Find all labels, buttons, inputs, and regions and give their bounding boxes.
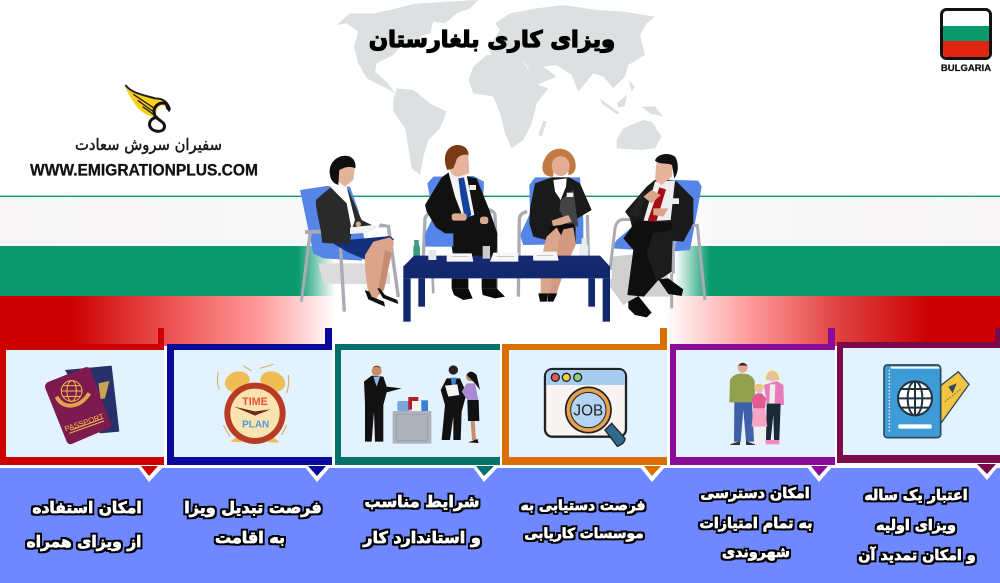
floor shadow bbox=[318, 263, 390, 284]
card frame bbox=[0, 328, 164, 465]
flag caption: BULGARIA bbox=[941, 63, 991, 74]
panel scene bbox=[300, 145, 705, 322]
label: شرایط مناسب bbox=[364, 492, 480, 511]
pointer bbox=[973, 464, 1000, 480]
label: امکان استفاده bbox=[32, 499, 142, 517]
title: ویزای کاری بلغارستان bbox=[369, 27, 615, 53]
logo bbox=[30, 85, 258, 180]
card 2: convert visa to residence bbox=[167, 328, 332, 547]
pointer bbox=[472, 466, 499, 482]
card frame bbox=[670, 328, 835, 465]
seated man with blue tie bbox=[423, 145, 505, 300]
card 6: one-year validity bbox=[837, 328, 1000, 564]
logo Persian name: سفیران سروش سعادت bbox=[75, 135, 222, 155]
label: و استاندارد کار bbox=[362, 528, 481, 547]
water bottle right bbox=[580, 238, 588, 259]
pointer bbox=[806, 466, 833, 482]
icon: alarm clock: PLAN bbox=[242, 420, 269, 431]
flag badge bbox=[941, 10, 991, 74]
pointer bbox=[137, 466, 164, 482]
icon: office team bbox=[364, 365, 480, 444]
label: به تمام امتیازات bbox=[699, 516, 813, 532]
logo website: WWW.EMIGRATIONPLUS.COM bbox=[30, 160, 258, 180]
flag bbox=[942, 10, 990, 58]
card frame bbox=[837, 328, 1000, 463]
pointer bbox=[304, 466, 331, 482]
icon: passports bbox=[45, 366, 119, 444]
card 5: citizen benefits bbox=[670, 328, 835, 561]
icon: alarm clock: TIME bbox=[242, 396, 268, 408]
label: به اقامت bbox=[215, 528, 285, 547]
icon: family bbox=[729, 363, 784, 445]
logo icon: winged swan bbox=[125, 85, 171, 131]
table bbox=[403, 246, 610, 322]
water bottle left bbox=[413, 240, 420, 260]
label: شهروندی bbox=[722, 545, 790, 561]
icon: alarm clock bbox=[217, 364, 289, 444]
card 4: access to job agencies bbox=[502, 328, 667, 542]
icon: passports: PASSPORT bbox=[63, 412, 105, 434]
card frame bbox=[167, 328, 332, 465]
label: ویزای اولیه bbox=[876, 518, 956, 534]
seated man with red tie bbox=[610, 154, 705, 317]
card frame bbox=[335, 344, 500, 465]
card frame bbox=[502, 328, 667, 465]
blue text area bbox=[0, 468, 1000, 583]
shadow under table and right person bbox=[410, 253, 673, 305]
icon: job search window bbox=[545, 369, 626, 446]
icon: passport and ticket bbox=[884, 365, 969, 438]
pointer bbox=[639, 466, 666, 482]
world map bbox=[337, 0, 663, 175]
seated woman with auburn hair bbox=[518, 149, 592, 302]
label: امکان دسترسی bbox=[700, 486, 810, 502]
label: موسسات کاریابی bbox=[524, 526, 644, 542]
label: فرصت تبدیل ویزا bbox=[184, 498, 322, 517]
card 3: standard work conditions bbox=[335, 344, 500, 547]
card 1: companion visa bbox=[0, 328, 164, 551]
label: اعتبار یک ساله bbox=[864, 488, 968, 504]
label: از ویزای همراه bbox=[27, 533, 141, 551]
background: Bulgarian flag bands bbox=[0, 196, 1000, 346]
seated woman left bbox=[300, 156, 400, 312]
icon: job search window: JOB bbox=[573, 403, 603, 420]
label: و امکان تمدید آن bbox=[858, 546, 976, 564]
label: فرصت دستیابی به bbox=[521, 498, 645, 514]
